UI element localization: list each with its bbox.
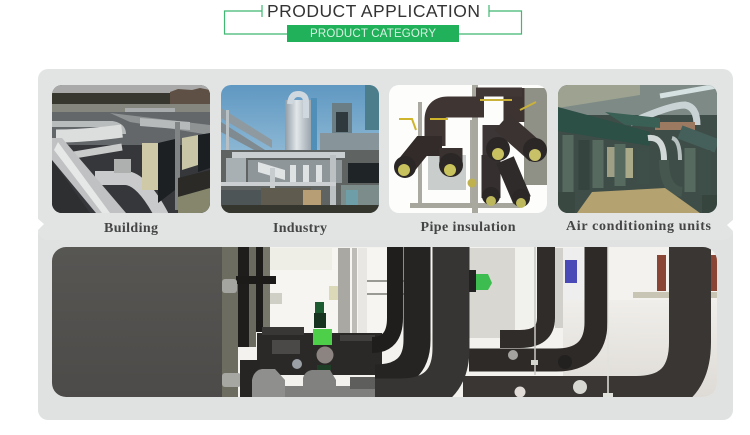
photo: insulated pipework: [52, 247, 717, 398]
photo: industry: [221, 85, 379, 213]
photo: pipe insulation: [389, 85, 547, 213]
label: industry: Industry: [273, 221, 327, 236]
panel: top application gallery: [37, 69, 734, 240]
photo: building: [52, 85, 210, 216]
label: pipe insulation: Pipe insulation: [420, 220, 516, 235]
photo: air conditioning units: [558, 85, 717, 213]
foreground pipes: [372, 247, 690, 397]
heading: PRODUCT APPLICATION: [267, 1, 480, 21]
panel: bottom wide photo: [38, 224, 733, 420]
low pipe cluster: [240, 327, 383, 397]
valve: green actuator: [292, 302, 334, 370]
title bracket lines: [224, 5, 522, 34]
label: air conditioning units: Air conditioning units: [566, 219, 712, 234]
title block: [224, 1, 522, 42]
category badge: [287, 25, 459, 42]
far wall and floor: [270, 248, 717, 397]
category badge: PRODUCT CATEGORY: [310, 28, 436, 40]
green valve right: [469, 270, 492, 292]
gauges and hangers: [508, 247, 613, 398]
steel columns: [338, 248, 404, 333]
label: building: Building: [104, 221, 158, 236]
dark wall panel: [52, 247, 276, 397]
